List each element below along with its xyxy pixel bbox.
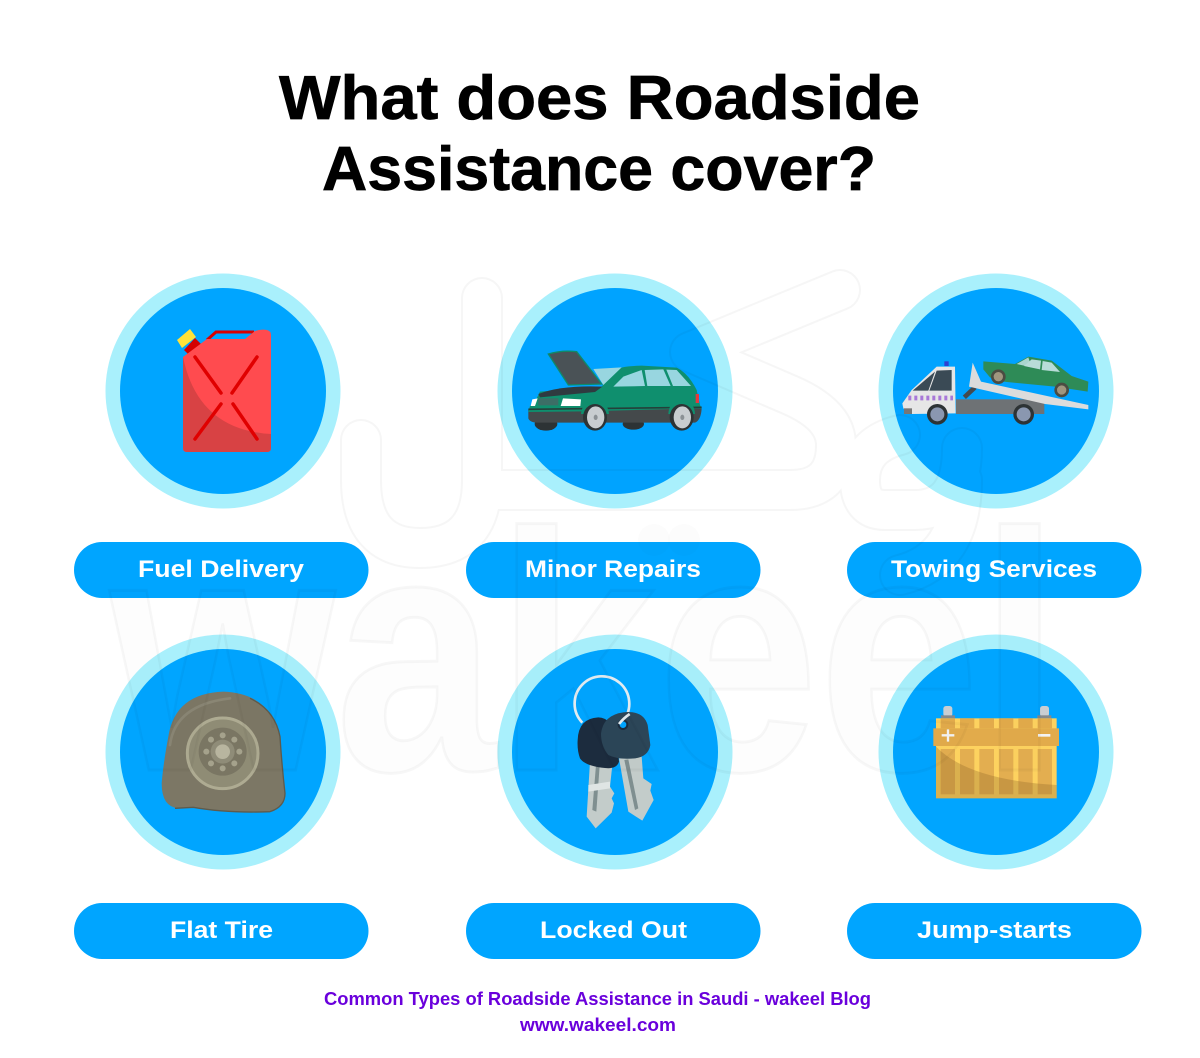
towing services circle badge — [878, 274, 1114, 508]
flat tire label: Flat Tire — [170, 917, 273, 944]
panel: locked out — [466, 634, 760, 959]
watermark: wakeel logo — [109, 269, 1040, 774]
icon: car battery — [933, 706, 1059, 798]
fuel delivery circle badge — [106, 274, 340, 508]
flat tire label — [74, 903, 368, 959]
jump-starts label — [847, 903, 1142, 959]
locked out label — [466, 903, 760, 959]
towing services label: Towing Services — [891, 556, 1097, 583]
panel: towing services — [847, 274, 1142, 598]
locked out circle badge — [498, 634, 732, 870]
panel: minor repairs — [466, 274, 760, 598]
fuel delivery label: Fuel Delivery — [138, 556, 304, 583]
minor repairs circle badge — [498, 274, 732, 508]
title: Assistance cover? — [322, 135, 876, 204]
footer caption: Common Types of Roadside Assistance in Saudi - wakeel Blog — [324, 989, 871, 1009]
icon: flat tire — [162, 692, 285, 812]
panel: fuel delivery — [74, 274, 368, 598]
minor repairs label: Minor Repairs — [525, 556, 701, 583]
icon: red jerrycan — [177, 329, 271, 452]
flat tire circle badge — [106, 634, 340, 870]
fuel delivery label — [74, 542, 368, 598]
panel: jump-starts — [847, 634, 1142, 959]
jump-starts label: Jump-starts — [917, 917, 1072, 944]
icon: tow truck carrying green car — [902, 357, 1088, 425]
title — [279, 64, 920, 204]
footer caption: www.wakeel.com — [519, 1015, 676, 1035]
title: What does Roadside — [279, 64, 920, 133]
panel: flat tire — [74, 634, 368, 959]
minor repairs label — [466, 542, 760, 598]
watermark: wakeel logo: wakeel — [105, 463, 1060, 843]
jump-starts circle badge — [878, 634, 1114, 870]
footer caption — [324, 989, 871, 1035]
locked out label: Locked Out — [540, 917, 687, 944]
towing services label — [847, 542, 1142, 598]
icon: car keys on ring — [575, 676, 654, 828]
icon: green car with open hood — [528, 351, 702, 431]
